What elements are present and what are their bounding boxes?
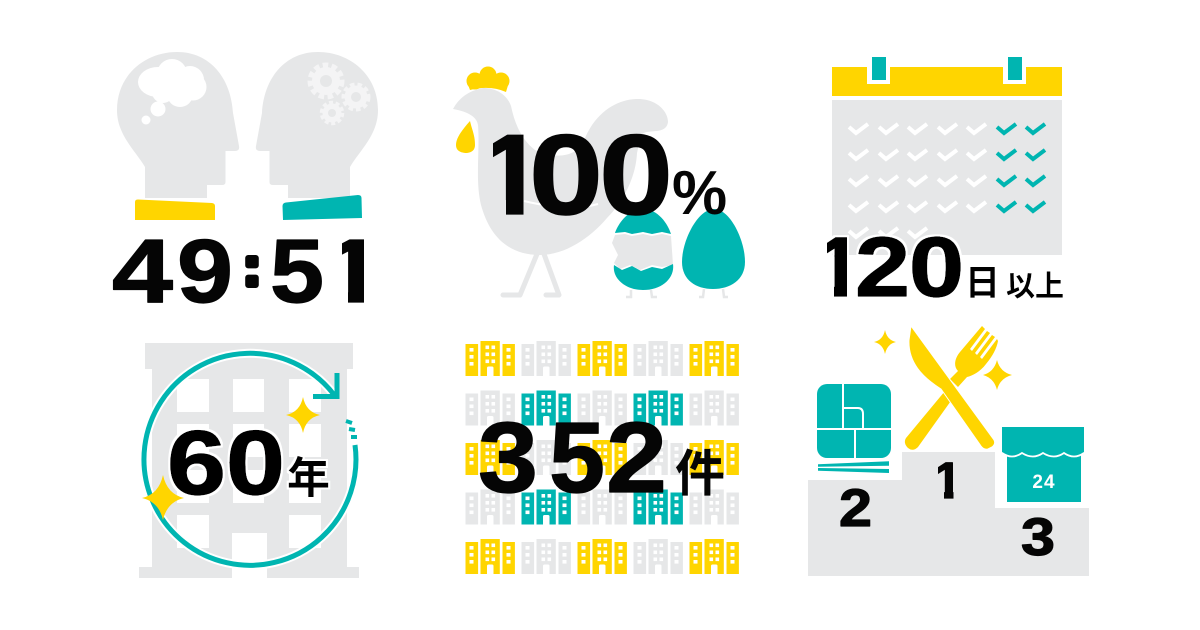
icon: sparkle [983, 360, 1012, 390]
podium rank numbers: 2 [839, 479, 872, 538]
number 60 years: 0 [226, 413, 285, 514]
icon: knife [909, 326, 995, 449]
number 120 days or more: 日 [965, 264, 1000, 303]
icon: wing highlight [524, 201, 598, 207]
icon: calendar page [832, 100, 1062, 255]
panel: 352 buildings [466, 341, 739, 574]
icon: calendar rings [872, 57, 1022, 80]
icon: sparkle [142, 475, 184, 520]
panel: 60 years building [139, 343, 359, 578]
podium rank numbers: 1 [934, 452, 962, 509]
number 100% [493, 134, 726, 216]
number 352 [478, 402, 725, 514]
row of buildings 5 [466, 539, 739, 574]
icon: 24-hour store [1002, 427, 1084, 502]
row of buildings 1 [466, 341, 739, 376]
icon: teal square food [817, 384, 891, 473]
podium rank numbers: 3 [1021, 508, 1055, 567]
icon: fork [905, 326, 998, 450]
number 100%: 0 [529, 112, 603, 239]
number 120 days or more: 0 [909, 220, 964, 314]
panel: 120 days calendar [827, 57, 1063, 299]
number 100%: % [672, 159, 727, 228]
icon: 24-hour store: 24 [1032, 472, 1056, 493]
number 352: 2 [606, 402, 667, 514]
number 60 years: 年 [287, 455, 330, 503]
ratio number: 5 [270, 222, 324, 322]
icon: sparkle [286, 397, 320, 433]
arrow: renewal circle [144, 353, 357, 565]
icon: whole teal egg [682, 209, 745, 297]
number 120 days or more: 1 [816, 220, 862, 314]
ratio number: : [243, 237, 261, 297]
ratio number: 9 [177, 222, 233, 322]
row of buildings 2 [466, 390, 739, 426]
panel: 100% chicken and eggs [453, 66, 745, 297]
number 100%: 1 [478, 112, 546, 239]
icon: teal collar [282, 195, 362, 220]
number 352: 件 [675, 446, 725, 502]
number 60 years: 6 [167, 413, 226, 514]
icon: chicken comb [466, 66, 510, 92]
icon: right head with gears [256, 52, 378, 198]
number 120 days or more [827, 234, 1063, 299]
number 120 days or more: 以上 [1006, 270, 1064, 303]
icon: chicken body [453, 88, 668, 255]
row of buildings 3 [466, 440, 739, 475]
icon: white checks [849, 124, 986, 237]
podium rank numbers [840, 462, 1054, 556]
icon: sparkle [874, 330, 896, 354]
icon: podium [808, 452, 1089, 576]
icon: chicken legs [503, 254, 559, 295]
number 120 days or more: 2 [855, 220, 910, 314]
ratio number [112, 238, 364, 304]
icon: calendar header [832, 67, 1062, 96]
panel: podium ranking [808, 326, 1089, 576]
number 352: 3 [478, 402, 538, 514]
panel: 49:51 heads [112, 52, 385, 322]
icon: yellow collar [135, 200, 215, 220]
icon: teal checks [997, 124, 1045, 211]
number 60 years [167, 413, 330, 514]
icon: building [139, 343, 359, 578]
icon: left head with thought bubble [117, 52, 239, 198]
number 352: 5 [549, 402, 605, 514]
ratio number: 1 [323, 222, 385, 322]
row of buildings 4 [466, 490, 739, 524]
icon: broken teal egg [612, 209, 673, 297]
icon: chicken wattle [456, 121, 475, 153]
number 100%: 0 [599, 112, 673, 239]
ratio number: 4 [112, 222, 173, 322]
